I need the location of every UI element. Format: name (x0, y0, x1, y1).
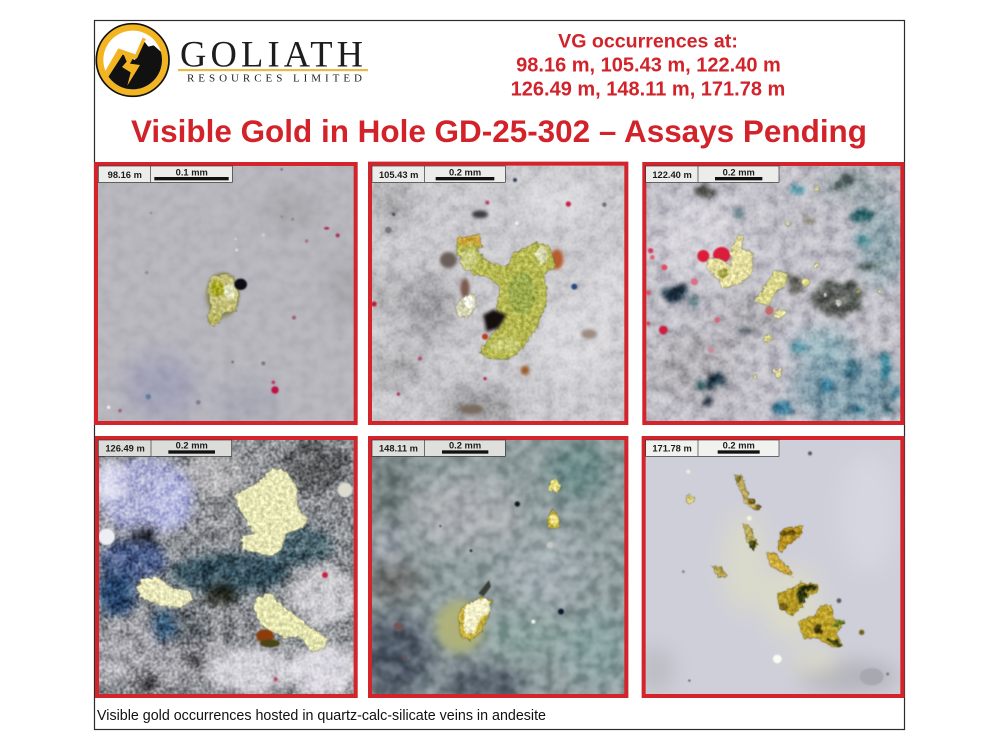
frame (370, 164, 626, 423)
panel: 148.11 m (358, 436, 635, 700)
icon: gold ring with mountain and lightning bolt (96, 24, 169, 96)
frame (644, 164, 902, 423)
photo: gold specks in grey-green rock (358, 436, 635, 700)
depth and scale label: 148.11 m (379, 443, 418, 453)
depth and scale label (372, 166, 505, 182)
frame (97, 438, 356, 696)
depth and scale label: 98.16 m (108, 170, 142, 180)
panel: 122.40 m (642, 162, 905, 425)
depth and scale label: 0.2 mm (449, 441, 481, 451)
tagline: RESOURCES LIMITED (187, 72, 362, 84)
depth and scale label: 126.49 m (105, 443, 145, 453)
depth and scale label (646, 166, 779, 182)
photo: pale gold flakes in dark blue sulphide and quartz (93, 436, 358, 698)
depth and scale label (98, 440, 232, 456)
depth and scale label: 0.1 mm (176, 167, 208, 177)
depth and scale label: 0.2 mm (176, 441, 208, 451)
heading: VG occurrence depths: 126.49 m, 148.11 m, 171.78 m (511, 78, 785, 100)
photo: single gold grain on pale grey quartz (94, 162, 363, 425)
wordmark: GOLIATH (180, 34, 363, 75)
outer frame (94, 20, 904, 730)
photo: branching gold grain in white quartz (368, 162, 632, 425)
depth and scale label: 122.40 m (652, 170, 692, 180)
photo: scattered gold grains on pale quartz (635, 436, 904, 698)
depth and scale label: 171.78 m (652, 443, 692, 453)
photo: gold flakes in speckled teal and white rock (642, 162, 905, 425)
depth and scale label (98, 166, 232, 182)
panel: 126.49 m (93, 436, 358, 698)
frame (644, 438, 902, 696)
depth and scale label: 0.2 mm (723, 167, 755, 177)
gold underline (178, 69, 368, 71)
panel: 98.16 m (94, 162, 363, 425)
heading: VG occurrence depths (511, 30, 785, 100)
depth and scale label: 105.43 m (379, 170, 418, 180)
panel: 171.78 m (635, 436, 904, 698)
frame (370, 438, 626, 696)
heading: VG occurrence depths: 98.16 m, 105.43 m, 122.40 m (516, 54, 781, 76)
frame (96, 164, 356, 423)
depth and scale label (646, 440, 779, 456)
infographic canvas (94, 20, 906, 730)
depth and scale label: 0.2 mm (723, 441, 755, 451)
heading: VG occurrence depths: VG occurrences at: (558, 30, 738, 52)
depth and scale label: 0.2 mm (449, 167, 481, 177)
title: Visible Gold in Hole GD-25-302 – Assays Pending (131, 113, 867, 149)
panel: 105.43 m (368, 162, 632, 425)
depth and scale label (372, 440, 505, 456)
logo: Goliath Resources Limited (96, 24, 368, 96)
caption: Visible gold occurrences hosted in quartz-calc-silicate veins in andesite (97, 708, 546, 724)
